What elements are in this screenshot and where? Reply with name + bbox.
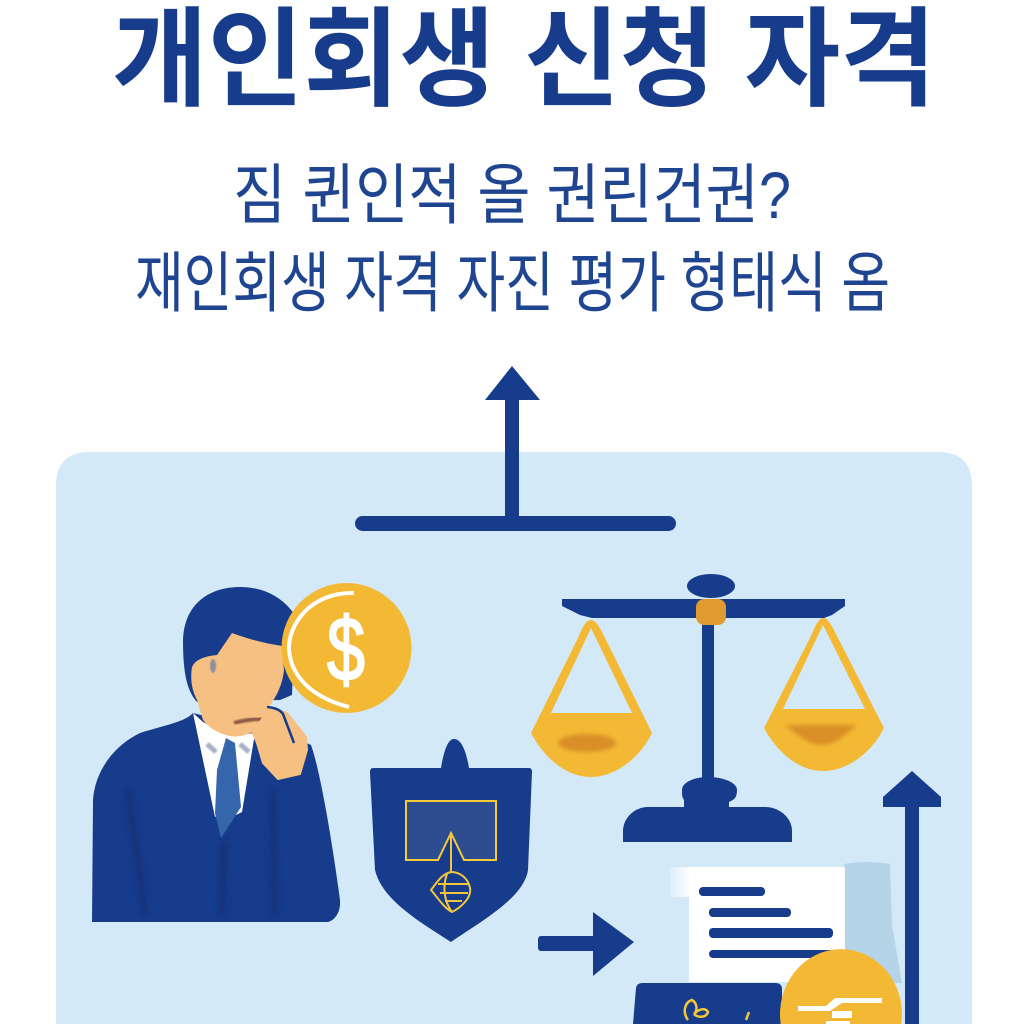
suit fold shading (128, 790, 275, 915)
shield emblem (431, 836, 470, 912)
right pan shadow (785, 725, 857, 745)
right pan (764, 618, 884, 771)
tie (215, 738, 241, 838)
scale pole (702, 620, 714, 785)
icon: balance scale (531, 574, 884, 842)
scale base knob (682, 777, 737, 808)
face (191, 633, 284, 736)
card body (633, 983, 782, 1024)
icon: bottom coin (780, 949, 902, 1024)
left pan shadow (558, 734, 616, 752)
ear shade (210, 659, 216, 673)
icon: navy card (633, 983, 782, 1024)
arrow: right up arrow (883, 771, 941, 1024)
subtitle (135, 158, 890, 320)
card emblem (685, 1000, 749, 1020)
arrow: right arrow to document (538, 912, 634, 976)
shield body (370, 739, 532, 942)
document paper (689, 867, 845, 982)
shirt (193, 713, 255, 817)
dollar sign: $ (327, 600, 365, 700)
coin disc (282, 583, 412, 713)
fingers (267, 707, 294, 743)
document text lines (699, 887, 835, 958)
scale beam (562, 599, 845, 618)
title: 개인회생 신청 자격 (112, 0, 936, 120)
document paper edge (670, 867, 689, 897)
hand (253, 707, 307, 779)
icon: document (670, 862, 902, 983)
mouth shadow (234, 719, 277, 723)
bottom coin disc (780, 949, 902, 1024)
hair (183, 587, 295, 702)
icon: dollar coin (282, 583, 412, 713)
left pan (531, 620, 652, 777)
arrow: top up arrow with bar (355, 366, 676, 531)
collar shade (207, 744, 249, 752)
subtitle line 1: 짐 퀸인적 올 권린건권? (233, 158, 791, 232)
icon: thinking man (92, 587, 340, 922)
icon: shield (370, 739, 532, 942)
shield window (406, 801, 496, 860)
panel: light blue background (56, 452, 972, 1024)
scale pivot (696, 599, 726, 625)
scale top knob (687, 574, 735, 598)
suit (92, 713, 340, 922)
bottom coin marks (798, 998, 882, 1024)
coin highlight (289, 593, 354, 707)
document shadow (844, 862, 902, 983)
scale base (623, 807, 792, 842)
